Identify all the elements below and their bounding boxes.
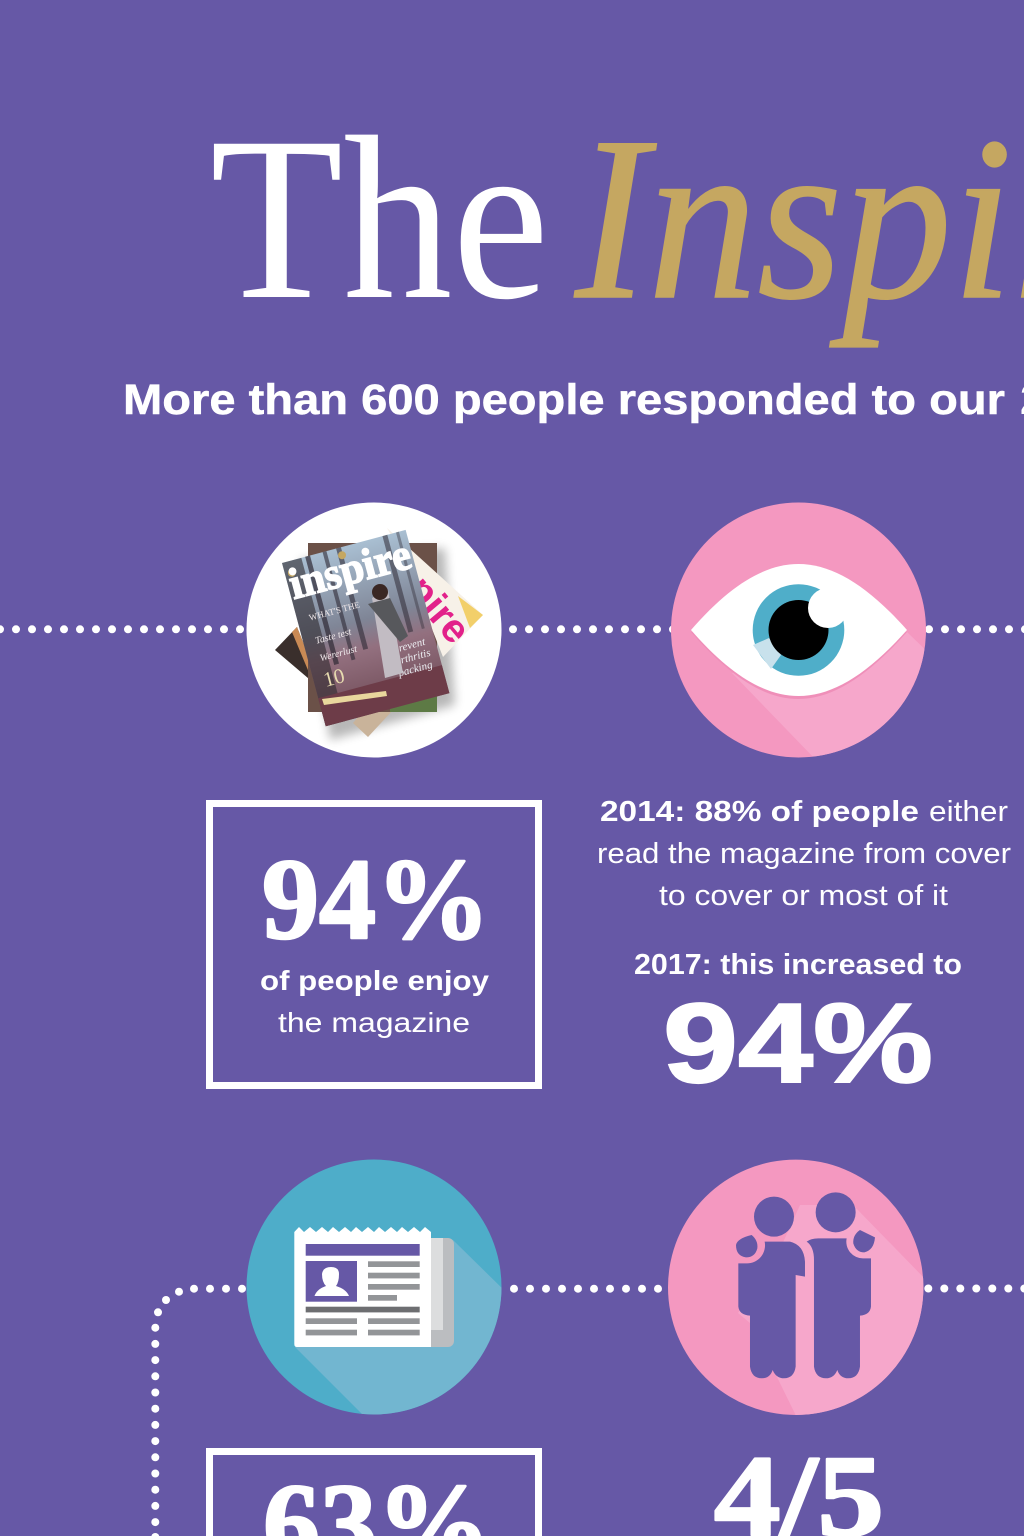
icon: magazine stack: arthritis bbox=[394, 647, 432, 668]
text block: readership 2014 vs 2017: to cover or most of it bbox=[659, 880, 948, 912]
stat box: 63% bbox=[210, 1452, 538, 1536]
icon: magazine stack: inspire bbox=[284, 529, 416, 609]
icon: magazine stack: Taste test bbox=[314, 627, 353, 647]
text block: readership 2014 vs 2017: 94% bbox=[663, 980, 933, 1106]
text block: readership 2014 vs 2017: read the magazine from cover bbox=[597, 838, 1011, 870]
icon: magazine stack: WHAT'S THE bbox=[308, 599, 361, 623]
text block: readership 2014 vs 2017: either bbox=[929, 796, 1008, 828]
icon: eye bbox=[671, 502, 940, 760]
stat box: 94% enjoy: the magazine bbox=[278, 1007, 470, 1038]
dotted connector: row one bbox=[0, 625, 1024, 633]
icon: magazine stack: Prevent bbox=[390, 636, 427, 656]
icon: magazine stack bbox=[246, 502, 502, 758]
icon: magazine stack: packing bbox=[396, 659, 434, 680]
text block: readership 2014 vs 2017: 2014: 88% of people bbox=[600, 796, 919, 828]
icon: magazine stack: 10 bbox=[321, 663, 347, 692]
stat box: 94% enjoy: of people enjoy bbox=[260, 965, 489, 996]
icon: magazine stack: pire bbox=[398, 568, 479, 652]
stat box: 94% enjoy: 94% bbox=[262, 836, 490, 964]
dotted connector: row two bbox=[151, 1288, 1024, 1536]
title bbox=[210, 88, 1024, 348]
icon: newspaper bbox=[246, 1160, 510, 1430]
subtitle: More than 600 people responded to our bbox=[123, 376, 1005, 424]
icon: magazine stack: Wererlust bbox=[319, 644, 359, 664]
title: The bbox=[210, 88, 549, 348]
icon: two friends bbox=[668, 1160, 930, 1430]
text block: readership 2014 vs 2017: 2017: this increased to bbox=[634, 949, 962, 981]
text block: readership 2014 vs 2017 bbox=[597, 796, 1011, 1106]
stat box: 94% enjoy bbox=[210, 804, 538, 1086]
